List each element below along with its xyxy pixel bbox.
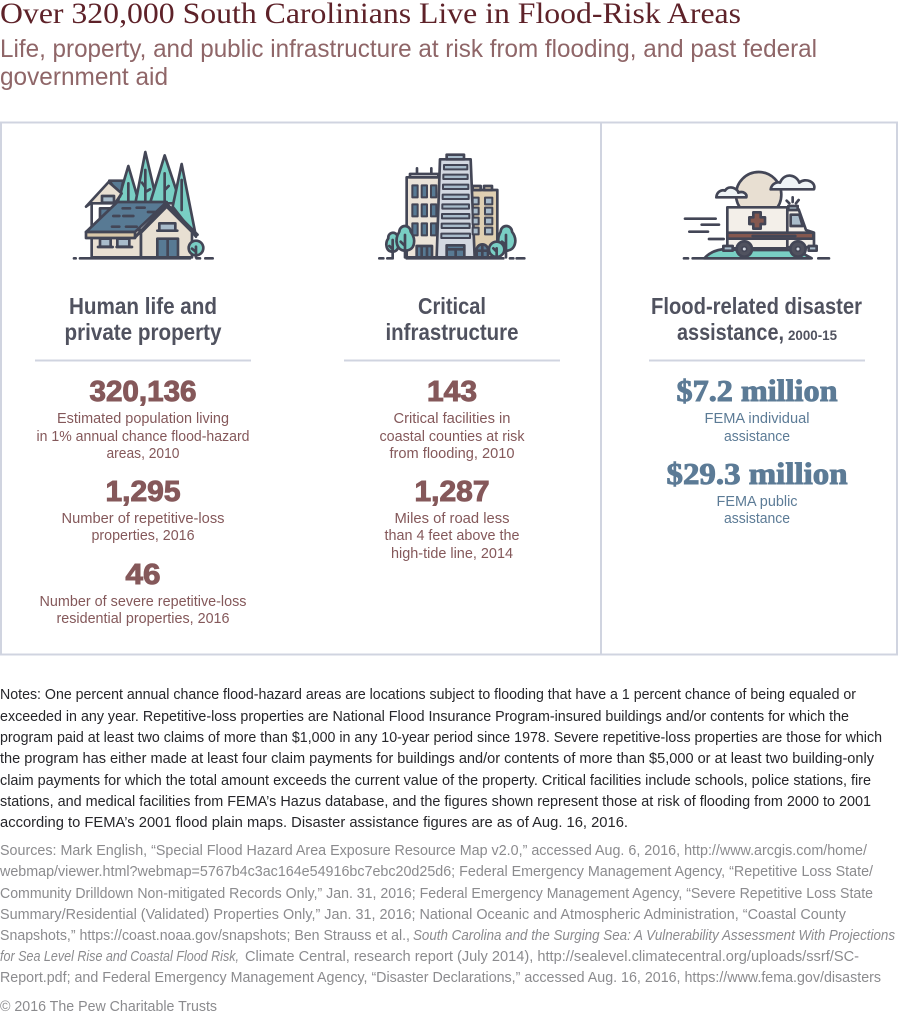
- stat: 320,136: [36, 376, 250, 462]
- stat: $29.3 million: [666, 456, 848, 527]
- stat: 320,136: 320,136: [90, 376, 196, 408]
- stat: $29.3 million: assistance: [724, 510, 790, 527]
- panel: main frame: [1, 122, 897, 655]
- sources text block: Snapshots,” https://coast.noaa.gov/snapshots; Ben Strauss et al.,: [0, 928, 410, 944]
- notes text block: according to FEMA’s 2001 flood plain maps. Disaster assistance figures are as of Aug. 16, 2016.: [0, 815, 628, 831]
- column: critical infrastructure: [344, 293, 560, 562]
- notes text block: program paid at least two claims of more than $1,000 in any 10-year period since 1978. Severe repetitive-loss properties are those for which: [0, 730, 882, 746]
- stat: $7.2 million: $7.2 million: [676, 373, 838, 408]
- heading: disaster assistance: [651, 293, 862, 345]
- stat: 46: residential properties, 2016: [56, 610, 230, 627]
- column: human life and private property: [35, 293, 251, 627]
- stat: 46: 46: [126, 559, 160, 591]
- heading: human life: private property: [64, 319, 222, 345]
- stat: 1,295: properties, 2016: [92, 527, 194, 544]
- sources text block: [0, 843, 895, 986]
- notes text block: exceeded in any year. Repetitive-loss properties are National Flood Insurance Program-insured buildings and/or contents for which the: [0, 709, 849, 725]
- stat: 1,287: [384, 476, 520, 562]
- sources text block: Climate Central, research report (July 2014), http://sealevel.climatecentral.org/uploads/ssrf/SC-: [245, 949, 859, 965]
- notes text block: claim payments for which the total amount exceeds the current value of the property. Critical facilities include schools, police stations, fire: [0, 773, 871, 789]
- column: disaster assistance: [649, 293, 865, 527]
- subtitle: government aid: [0, 63, 168, 91]
- notes text block: [0, 687, 882, 831]
- notes text block: Notes: One percent annual chance flood-hazard areas are locations subject to flooding that have a 1 percent chance of being equaled or: [0, 687, 856, 703]
- stat: 46: Number of severe repetitive-loss: [40, 593, 246, 610]
- stat: 143: from flooding, 2010: [390, 445, 514, 462]
- stat: 320,136: Estimated population living: [57, 410, 229, 427]
- stat: 1,287: than 4 feet above the: [384, 527, 520, 544]
- notes text block: the program has either made at least four claim payments for buildings and/or contents of more than $5,000 or at least two building-only: [0, 751, 875, 767]
- stat: $7.2 million: assistance: [724, 428, 790, 445]
- stat: 143: Critical facilities in: [394, 410, 510, 427]
- stat: 46: [40, 559, 246, 627]
- heading: critical infrastructure: [386, 293, 518, 345]
- stat: 143: coastal counties at risk: [380, 428, 525, 445]
- sources text block: webmap/viewer.html?webmap=5767b4c3ac164e54916bc7ebc20d25d6; Federal Emergency Management Agency, “Repetitive Loss State/: [0, 864, 874, 880]
- stat: $29.3 million: FEMA public: [716, 493, 798, 510]
- stat: 320,136: in 1% annual chance flood-hazard: [36, 428, 250, 445]
- notes text block: stations, and medical facilities from FEMA’s Hazus database, and the figures shown represent those at risk of flooding from 2000 to 2001: [0, 794, 871, 810]
- subtitle: [0, 35, 817, 91]
- sources text block: for Sea Level Rise and Coastal Flood Risk,: [0, 949, 239, 965]
- copyright: © 2016 The Pew Charitable Trusts: [0, 999, 217, 1015]
- stat: $29.3 million: $29.3 million: [666, 456, 848, 491]
- stat: $7.2 million: FEMA individual: [704, 410, 810, 427]
- icon: city buildings: [379, 155, 524, 258]
- stat: 143: 143: [427, 376, 477, 408]
- sources text block: Report.pdf; and Federal Emergency Management Agency, “Disaster Declarations,” accessed Aug. 16, 2016, https://www.fema.gov/disasters: [0, 970, 881, 986]
- heading: human life: Human life and: [69, 293, 217, 319]
- stat: 1,295: 1,295: [106, 476, 180, 508]
- heading: disaster assistance: assistance,: [677, 319, 784, 345]
- icon: ambulance: [684, 172, 829, 258]
- stat: 1,287: high-tide line, 2014: [391, 545, 513, 562]
- heading: disaster assistance: Flood-related disaster: [651, 293, 862, 319]
- stat: 1,287: 1,287: [414, 476, 490, 508]
- heading: disaster assistance: 2000-15: [788, 327, 837, 343]
- stat: $7.2 million: [676, 373, 838, 445]
- sources text block: Sources: Mark English, “Special Flood Hazard Area Exposure Resource Map v2.0,” accessed Aug. 6, 2016, http://www.arcgis.com/home/: [0, 843, 868, 859]
- heading: critical infrastructure: infrastructure: [386, 319, 518, 345]
- stat: 1,295: [62, 476, 224, 544]
- heading: human life: [64, 293, 222, 345]
- sources text block: Community Drilldown Non-mitigated Records Only,” Jan. 31, 2016; Federal Emergency Management Agency, “Severe Repetitive Loss State: [0, 886, 873, 902]
- sources text block: Summary/Residential (Validated) Properties Only,” Jan. 31, 2016; National Oceanic and Atmospheric Administration, “Coastal County: [0, 907, 847, 923]
- heading: critical infrastructure: Critical: [418, 293, 486, 319]
- subtitle: Life, property, and public infrastructure at risk from flooding, and past federal: [0, 35, 817, 63]
- stat: 143: [380, 376, 525, 462]
- stat: 1,295: Number of repetitive-loss: [62, 510, 224, 527]
- icon: house with trees: [74, 152, 213, 258]
- stat: 1,287: Miles of road less: [394, 510, 510, 527]
- stat: 320,136: areas, 2010: [106, 445, 180, 462]
